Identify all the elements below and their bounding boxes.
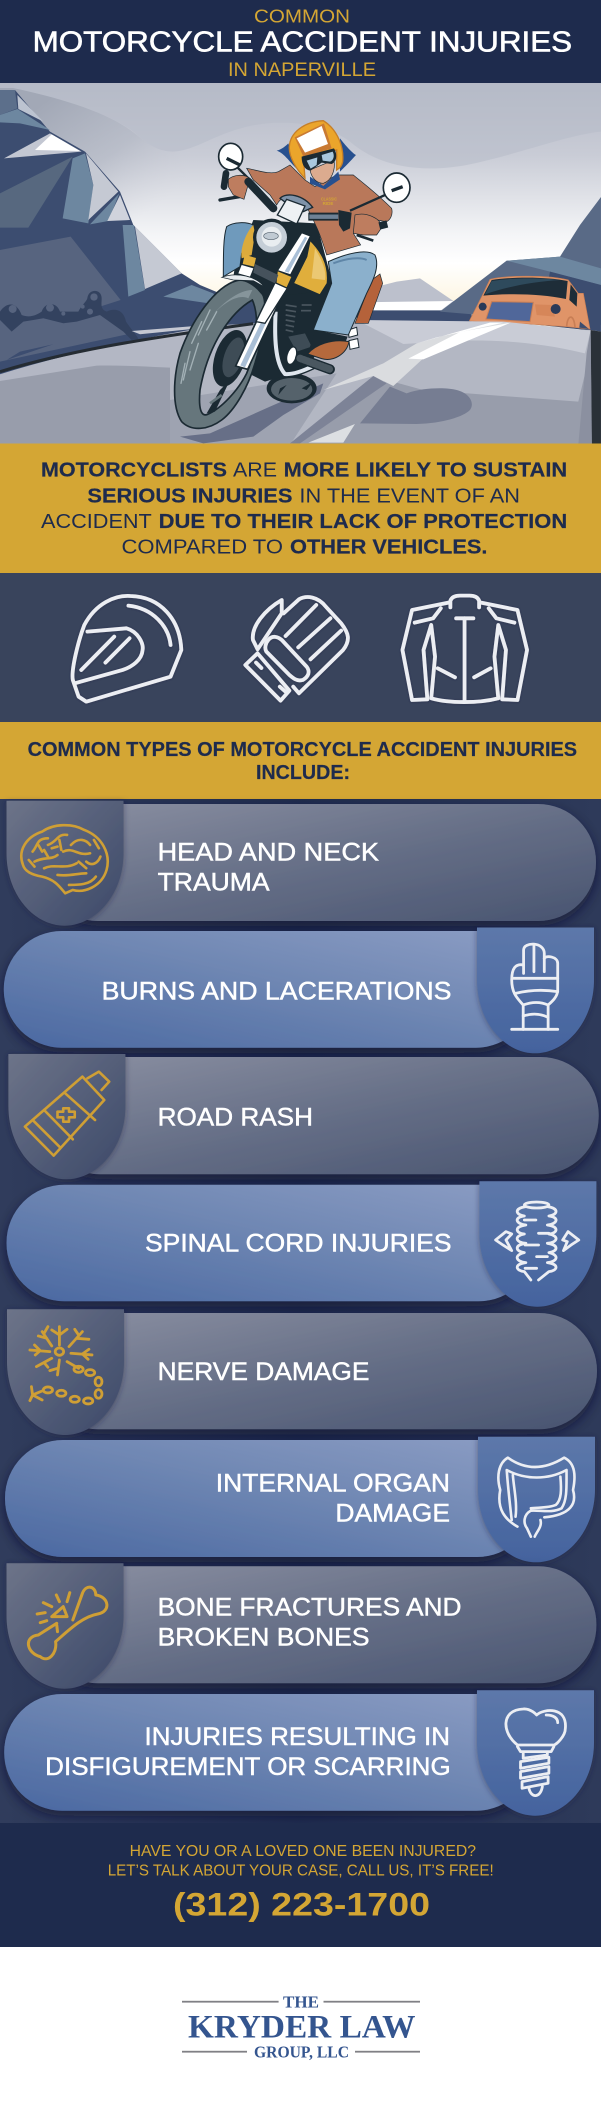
label: NERVE DAMAGE xyxy=(158,1358,370,1386)
intro text: COMPARED TO xyxy=(122,536,283,558)
phone number: (312) 223-1700 xyxy=(173,1887,430,1923)
truck xyxy=(469,276,590,329)
rider and motorcycle upper: CLASSIC xyxy=(321,197,337,202)
icon: jacket xyxy=(402,596,527,702)
header banner xyxy=(0,0,601,83)
heading: common: COMMON xyxy=(254,6,350,27)
label: BONE FRACTURES AND xyxy=(158,1593,462,1621)
logo: the kryder law group: GROUP, LLC xyxy=(254,2042,349,2061)
title: MOTORCYCLE ACCIDENT INJURIES xyxy=(33,27,572,59)
injury: head and neck trauma xyxy=(6,801,596,926)
intro text: ARE xyxy=(233,460,277,482)
label: TRAUMA xyxy=(158,869,270,897)
gold band: common types heading: INCLUDE: xyxy=(256,762,350,784)
icon: spine xyxy=(496,1202,579,1280)
motorcycle wheels and engine xyxy=(175,280,359,428)
label: HEAD AND NECK xyxy=(158,839,379,867)
label xyxy=(45,1723,451,1781)
injury: spinal cord injuries xyxy=(6,1181,596,1307)
intro text: MORE LIKELY TO SUSTAIN xyxy=(284,460,567,482)
protective gear panel xyxy=(0,573,601,722)
logo: the kryder law group: KRYDER LAW xyxy=(188,2009,416,2045)
gold band: common types heading: COMMON TYPES OF MOTORCYCLE ACCIDENT INJURIES xyxy=(28,739,577,761)
label: BURNS AND LACERATIONS xyxy=(102,977,451,1005)
icon: broken bone xyxy=(28,1587,107,1659)
label: INJURIES RESULTING IN xyxy=(144,1723,450,1751)
injury: road rash xyxy=(8,1054,599,1179)
icon: intestines xyxy=(498,1458,574,1537)
rider and motorcycle upper: RIDE xyxy=(323,201,333,206)
question text: HAVE YOU OR A LOVED ONE BEEN INJURED? xyxy=(130,1843,476,1860)
road xyxy=(0,321,356,444)
icon: tooth implant xyxy=(506,1709,565,1796)
injury: internal organ damage xyxy=(5,1437,595,1562)
intro text: DUE TO THEIR LACK OF PROTECTION xyxy=(159,511,567,533)
headlight and fork xyxy=(277,233,311,275)
heading: in naperville: IN NAPERVILLE xyxy=(228,60,376,81)
logo: the kryder law group: THE xyxy=(283,1992,319,2011)
icon: bandaged hand xyxy=(512,944,558,1029)
label: SPINAL CORD INJURIES xyxy=(145,1230,452,1258)
gold band: common types heading xyxy=(0,722,601,799)
label xyxy=(158,839,379,897)
intro text: MOTORCYCLISTS xyxy=(41,460,227,482)
label xyxy=(216,1470,450,1528)
handlebars xyxy=(248,182,273,208)
injury: nerve damage xyxy=(7,1309,597,1435)
intro text: OTHER VEHICLES. xyxy=(290,536,488,558)
motorcycle frame xyxy=(234,220,332,298)
intro gold band xyxy=(0,444,601,573)
label: ROAD RASH xyxy=(158,1104,313,1132)
call to action footer xyxy=(0,1823,601,1947)
label: INTERNAL ORGAN xyxy=(216,1470,450,1498)
tree line xyxy=(0,291,138,340)
intro text: ACCIDENT xyxy=(41,511,152,533)
helmet and head xyxy=(276,144,296,168)
icon: gloves xyxy=(245,597,348,701)
call text: LET’S TALK ABOUT YOUR CASE, CALL US, IT’S FREE! xyxy=(108,1862,494,1879)
icon: ointment tube xyxy=(25,1072,109,1156)
label: DAMAGE xyxy=(335,1500,450,1528)
logo: the kryder law group xyxy=(182,1992,420,2061)
label: BROKEN BONES xyxy=(158,1624,370,1652)
left mountain xyxy=(0,90,256,374)
injuries panel background xyxy=(0,799,601,1823)
far mountains xyxy=(357,197,601,332)
label xyxy=(158,1593,462,1652)
icon: neuron xyxy=(30,1327,102,1404)
injury: disfigurement or scarring xyxy=(4,1690,594,1816)
mirrors xyxy=(219,143,410,241)
intro text: SERIOUS INJURIES xyxy=(87,485,292,507)
illustration: motorcyclist on mountain road xyxy=(0,82,601,445)
intro text: IN THE EVENT OF AN xyxy=(299,485,520,507)
intro text xyxy=(41,460,567,558)
icon: brain xyxy=(21,825,108,893)
rider and motorcycle upper xyxy=(219,121,410,335)
label: DISFIGUREMENT OR SCARRING xyxy=(45,1753,451,1781)
icon: helmet xyxy=(73,596,181,702)
injury: bone fractures and broken bones xyxy=(6,1563,596,1689)
injury: burns and lacerations xyxy=(4,928,594,1053)
